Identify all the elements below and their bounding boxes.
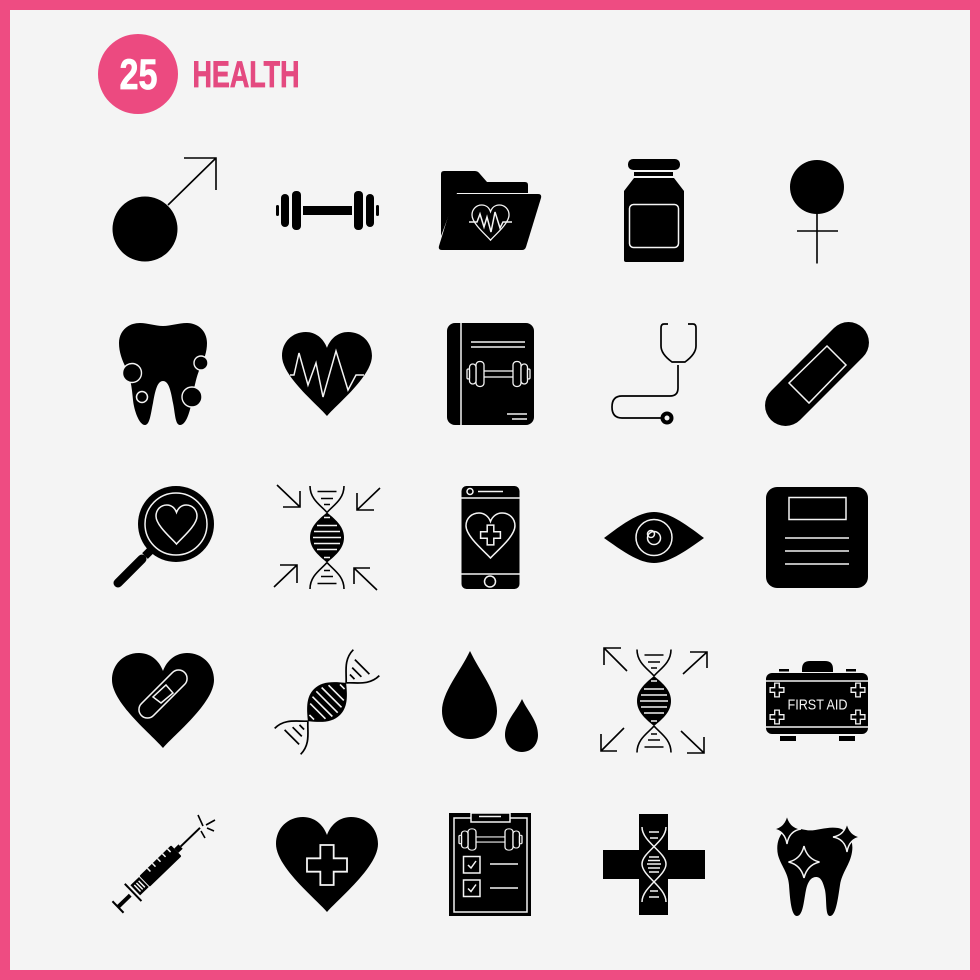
- icon: medical cross with dna: [603, 814, 705, 915]
- icon: heart magnifier: [118, 486, 214, 583]
- icon: bandage: [757, 314, 877, 434]
- number badge: [98, 34, 178, 114]
- label: first aid: FIRST AID: [788, 696, 848, 714]
- icon: tooth with cavities: [119, 323, 208, 425]
- icon: syringe: [109, 815, 215, 916]
- icon: female symbol: [790, 160, 844, 264]
- heading: HEALTH: [192, 54, 300, 95]
- icon: medical folder: [439, 171, 541, 250]
- icon: eye: [604, 512, 704, 563]
- icon: weighing scale: [766, 487, 868, 588]
- icon: first aid kit: [766, 661, 868, 741]
- icon: stethoscope: [612, 324, 696, 422]
- icon: medicine jar: [624, 159, 684, 262]
- title: [98, 34, 300, 114]
- number badge: 25: [120, 51, 158, 99]
- icon: sparkling tooth: [773, 814, 861, 916]
- icon: dumbbell: [276, 191, 379, 230]
- icon: workout clipboard: [449, 813, 531, 916]
- icon: heart with cross: [276, 817, 378, 912]
- icon: dna with outward arrows: [601, 648, 707, 753]
- icon: bandaged heart: [112, 653, 214, 748]
- icon: health smartphone: [462, 486, 520, 589]
- icon: dna with inward arrows: [274, 485, 380, 590]
- icon: fitness book: [447, 323, 534, 425]
- icon: heart with pulse: [282, 332, 372, 416]
- icon: diagonal dna: [275, 650, 379, 754]
- icon: male symbol: [112, 158, 216, 262]
- icon: blood drops: [442, 651, 538, 752]
